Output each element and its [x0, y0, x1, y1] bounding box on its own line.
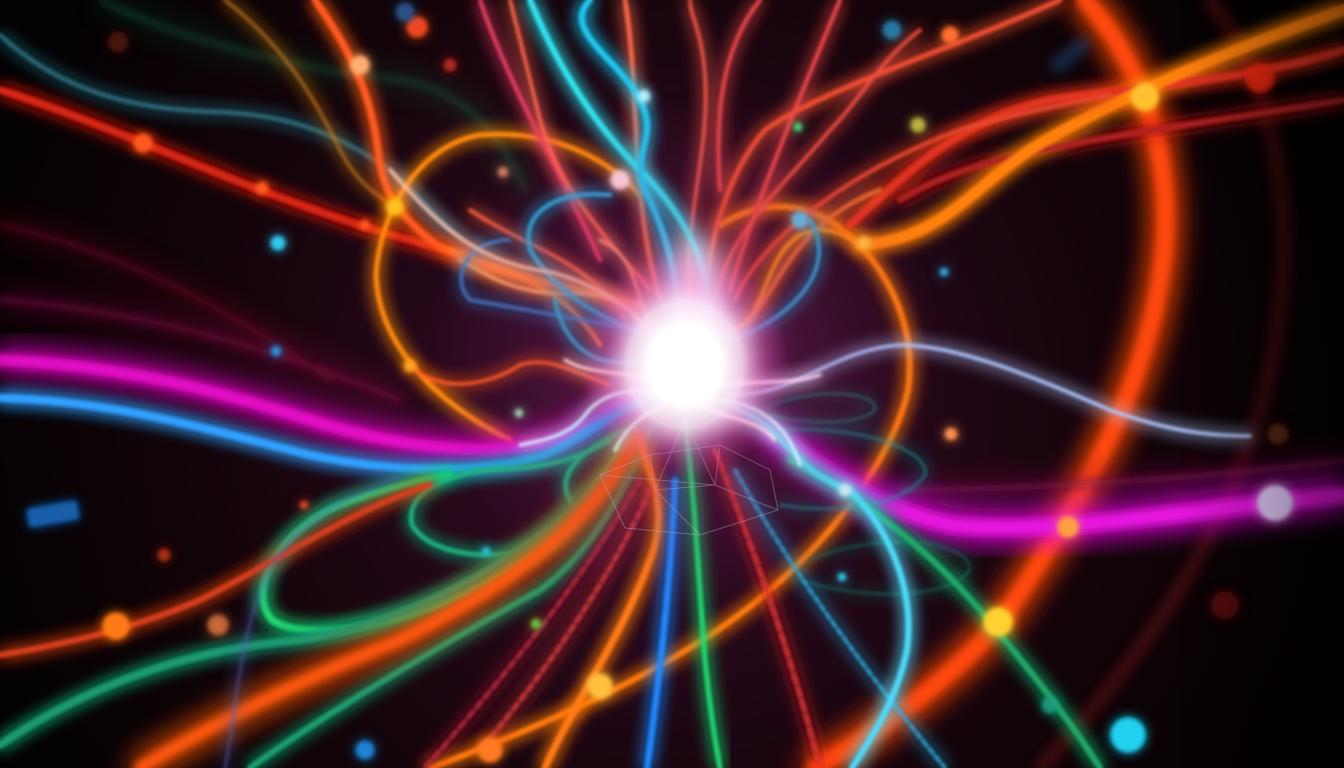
teal to violet stream, upper left [0, 35, 530, 275]
pale blue stream, right [730, 345, 1250, 436]
blurred blue dash, upper right [1049, 35, 1091, 75]
orange and red streams, upper right [850, 10, 1344, 245]
orange stream, lower centre [545, 440, 659, 768]
wireframe web below core [600, 420, 778, 535]
tan stream, upper left [225, 0, 400, 210]
dim background streams, left [0, 0, 525, 400]
heart-shaped orange loop [376, 134, 910, 768]
bright white core [580, 250, 790, 480]
orange stream, top left [315, 0, 640, 305]
pink stream, upper left of core [390, 170, 660, 345]
dashed rays below core [425, 450, 945, 768]
blurred blue dash, left [27, 501, 79, 527]
cyan stream, lower right [735, 408, 908, 768]
blue stream, left [0, 395, 660, 469]
faint ellipses, right of core [770, 394, 970, 594]
green ring, lower left [263, 430, 635, 630]
magenta stream, right [770, 430, 1344, 528]
green stream, lower right [790, 460, 1100, 768]
cyan filaments, top centre [461, 0, 819, 362]
white legs beneath the core [520, 360, 820, 465]
red stream, upper left [0, 90, 470, 255]
magenta stream, left [0, 360, 660, 449]
dim violet stream, lower left [225, 478, 400, 768]
large orange ring, right [815, 0, 1166, 768]
thick orange stream, lower left [140, 435, 638, 768]
red filaments, top centre [450, 0, 1110, 345]
green teal streams, lower left [0, 430, 650, 768]
teal ellipse, lower centre [411, 430, 625, 555]
green ray below core [685, 420, 720, 768]
right edge shadow [1180, 0, 1344, 768]
outer dim red ring [1040, 0, 1284, 768]
orange red stream, far lower left [0, 485, 430, 655]
core halo [425, 90, 945, 610]
core upper flare [665, 235, 725, 365]
